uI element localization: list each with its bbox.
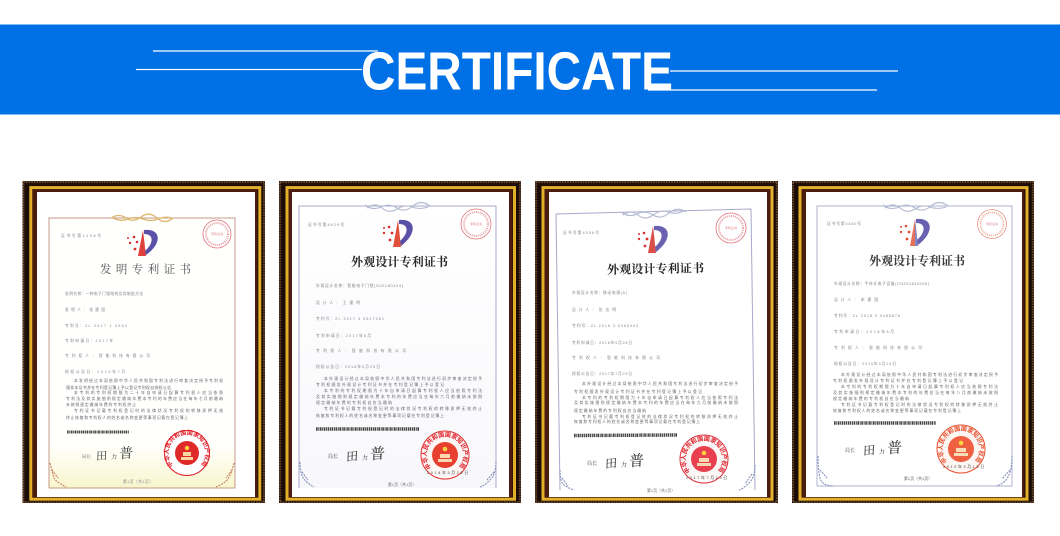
- data rows: 专利权人：智能科技有限公司: [65, 353, 150, 358]
- stamp: 专利证书: [470, 221, 482, 226]
- issue date: 2018年5月25日: [427, 470, 468, 475]
- data rows: 专利申请日：2017年: [65, 338, 113, 343]
- footer note: 第1页（共1页）: [388, 482, 416, 487]
- data rows: [572, 290, 660, 376]
- data rows: 设计人：宋建国: [834, 297, 878, 302]
- body paragraph: 本专利的专利权期限为二十年自申请日起算专利权人应当依照: [74, 390, 223, 395]
- panel: certificate 2: [279, 181, 521, 503]
- corner ornaments: [300, 462, 496, 487]
- stamp: [716, 213, 746, 243]
- body paragraph: 专利证书记载专利权登记时的法律状况专利权的转移质押无效: [74, 408, 223, 413]
- data rows: 专利申请日：2018年8月: [834, 329, 894, 334]
- data rows: 专利权人：智能科技有限公司: [834, 345, 922, 350]
- signature: 局长: [82, 453, 91, 460]
- picture frame: [792, 181, 1034, 503]
- body paragraph: 终止恢复和专利权人的姓名或名称变更等事项记载在登记簿上: [66, 415, 188, 420]
- logo: [127, 230, 158, 256]
- signature: 局长: [587, 460, 597, 467]
- data rows: 授权公告日：2019年3月15日: [834, 361, 896, 366]
- body paragraph: 专利证书记载专利权登记时的法律状况专利权的转移质押无效终止: [582, 414, 738, 419]
- data rows: 专利号：ZL 2017 1 0562: [65, 323, 127, 328]
- signature: [845, 439, 902, 459]
- body paragraph: 颁发本证书并在专利登记簿上予以登记专利权自授权公告: [66, 385, 171, 390]
- ornament: [365, 202, 430, 211]
- body paragraph: 规定缴纳年费的专利权自应当缴纳: [574, 408, 646, 413]
- data rows: 授权公告日：2018年5月25日: [316, 364, 380, 369]
- footer note: 第1页（共1页）: [904, 476, 932, 481]
- heading decoration lines: [136, 51, 898, 90]
- data rows: 专利申请日：2017年6月: [316, 333, 371, 338]
- body paragraph: 本外观设计经过本局依照中华人民共和国专利法进行初步审查决定授予: [582, 381, 738, 386]
- body paragraph: [316, 376, 482, 418]
- body paragraph: [66, 378, 223, 420]
- data rows: 专利权人：智能科技有限公司: [316, 348, 406, 353]
- certificate sheet: [298, 202, 497, 488]
- picture frame: [22, 181, 265, 503]
- signature: [82, 445, 133, 464]
- signature: 局长: [328, 453, 338, 460]
- data rows: [316, 283, 406, 369]
- signature: 田 力普: [605, 452, 644, 472]
- body paragraph: [574, 381, 738, 424]
- data rows: [65, 291, 150, 374]
- signature: 田 力普: [863, 439, 902, 459]
- data rows: 专利号：ZL 2017 3 0617261: [316, 316, 384, 321]
- signature: [328, 445, 385, 465]
- signature: 田 力普: [96, 445, 133, 464]
- title: CERTIFICATE: [361, 42, 673, 102]
- data rows: 设计人：张志明: [572, 307, 616, 312]
- data rows: 设计人：王建明: [316, 300, 360, 305]
- ornament: [621, 209, 686, 218]
- stamp: [203, 220, 231, 248]
- official seal: 中华人民共和国国家知识产权局: [164, 430, 210, 468]
- official seal: 中华人民共和国国家知识产权局: [680, 436, 728, 474]
- issue date: 2019年3月15日: [943, 464, 984, 469]
- corner ornaments: [818, 456, 1012, 486]
- body paragraph: 及其实施细则规定缴纳年费本专利的年费应当在每年九月前缴纳未按照: [574, 400, 738, 405]
- body paragraph: 恢复和专利权人的姓名或名称变更等事项记载在专利登记簿上: [574, 419, 700, 424]
- data rows: 发明名称：一种电子门锁结构及其制造方法: [65, 291, 143, 296]
- picture frame: [535, 181, 778, 503]
- certificate title: 外观设计专利证书: [607, 260, 705, 277]
- stamp: [978, 210, 1006, 238]
- signature: 田 力普: [346, 445, 385, 465]
- body paragraph: 专利权颁发外观设计专利证书并在专利登记簿上予以登记: [574, 389, 702, 394]
- body paragraph: 恢复和专利权人的姓名或名称变更等事项记载在专利登记簿上: [833, 408, 961, 413]
- panel: certificate 4: [792, 181, 1034, 503]
- body paragraph: 本专利的专利权期限为十年自申请日起算专利权人应当依照专利法: [324, 388, 482, 393]
- logo: [900, 219, 930, 246]
- body paragraph: 及其实施细则规定缴纳年费本专利的年费应当在每年八月前缴纳未按照: [833, 390, 998, 395]
- patent number: 证书号第4629号: [308, 222, 344, 227]
- ornament: [111, 214, 173, 222]
- stamp: 专利证书: [211, 231, 223, 236]
- data rows: 授权公告日：2017年7月25日: [572, 371, 632, 376]
- ornament: [883, 202, 948, 211]
- data rows: [834, 281, 930, 366]
- barcode: [834, 421, 936, 425]
- barcode: [316, 427, 419, 431]
- patent number: 证书号第4056号: [563, 230, 599, 235]
- body paragraph: 本发明经过本局依照中华人民共和国专利法进行审查决定授予专利权: [74, 378, 223, 383]
- body paragraph: [833, 372, 998, 413]
- body paragraph: 本专利的专利权期限为十年自申请日起算专利权人应当依照专利法: [841, 384, 998, 389]
- body paragraph: 专利证书记载专利权登记时的法律状况专利权的转移质押无效终止: [841, 402, 998, 407]
- header banner: [0, 24, 1060, 114]
- footer note: 第1页（共1页）: [647, 488, 675, 493]
- certificate title: 外观设计专利证书: [351, 254, 449, 269]
- body paragraph: 专利权颁发外观设计专利证书并在专利登记簿上予以登记: [316, 382, 444, 387]
- data rows: 外观设计名称：智能电子门锁(S20180424): [316, 283, 404, 288]
- data rows: 外观设计名称：手持式电子设备(CN201830095): [834, 281, 930, 286]
- issue date: 2017年7月25日: [686, 475, 727, 480]
- barcode: [67, 430, 129, 434]
- official seal: 中华人民共和国国家知识产权局: [422, 432, 468, 470]
- signature: 局长: [845, 447, 855, 454]
- body paragraph: 本外观设计经过本局依照中华人民共和国专利法进行初步审查决定授予: [324, 376, 482, 381]
- certificate title: 外观设计专利证书: [869, 253, 966, 268]
- body paragraph: 规定缴纳年费的专利权自应当缴纳: [833, 396, 909, 401]
- corner ornaments: [560, 465, 755, 490]
- data rows: 授权公告日：2019年7月: [65, 369, 125, 374]
- certificate sheet: [48, 214, 236, 488]
- body paragraph: 恢复和专利权人的姓名或名称变更等事项记载在专利登记簿上: [316, 413, 444, 418]
- body paragraph: 专利权颁发外观设计专利证书并在专利登记簿上予以登记: [833, 378, 963, 383]
- panel: certificate 3: [535, 181, 778, 503]
- footer note: 第1页（共1页）: [123, 479, 153, 484]
- barcode: [574, 433, 677, 437]
- certificate sheet: [816, 202, 1013, 486]
- body paragraph: 及其实施细则规定缴纳年费本专利的年费应当在每年六月前缴纳未按照: [316, 394, 482, 399]
- body paragraph: 规定缴纳年费的专利权自应当缴纳: [316, 400, 392, 405]
- logo: [638, 226, 668, 253]
- corner ornaments: [50, 463, 234, 487]
- data rows: 专利权人：智能科技有限公司: [572, 355, 660, 360]
- stamp: 专利证书: [725, 225, 737, 230]
- data rows: 发明人：张建国: [65, 307, 105, 312]
- patent number: 证书号第4380号: [827, 221, 861, 226]
- data rows: 外观设计名称：移动电源(A): [572, 290, 628, 295]
- body paragraph: 专利证书记载专利权登记时的法律状况专利权的转移质押无效终止: [324, 406, 482, 411]
- data rows: 专利号：ZL 2018 3 0485876: [834, 313, 900, 318]
- official seal: 中华人民共和国国家知识产权局: [938, 426, 984, 464]
- data rows: 专利号：ZL 2016 3 0365443: [572, 323, 638, 328]
- body paragraph: 本专利的专利权期限为十年自申请日起算专利权人应当依照专利法: [582, 395, 738, 400]
- logo: [383, 220, 413, 247]
- body paragraph: 未按照规定缴纳年费的专利权终止: [66, 402, 136, 407]
- panel: certificate 1: [22, 181, 265, 503]
- picture frame: [279, 181, 521, 503]
- signature: [587, 452, 644, 472]
- certificate sheet: [556, 208, 756, 493]
- body paragraph: 专利法及其实施细则规定缴纳年费本专利的年费应当在每年七月前缴纳: [66, 396, 223, 401]
- certificate title: 发明专利证书: [100, 262, 192, 276]
- body paragraph: 本外观设计经过本局依照中华人民共和国专利法进行初步审查决定授予: [841, 372, 998, 377]
- patent number: 证书号第1198号: [61, 233, 101, 238]
- stamp: 专利证书: [986, 221, 998, 226]
- data rows: 专利申请日：2016年9月26日: [572, 340, 632, 345]
- stamp: [461, 209, 491, 239]
